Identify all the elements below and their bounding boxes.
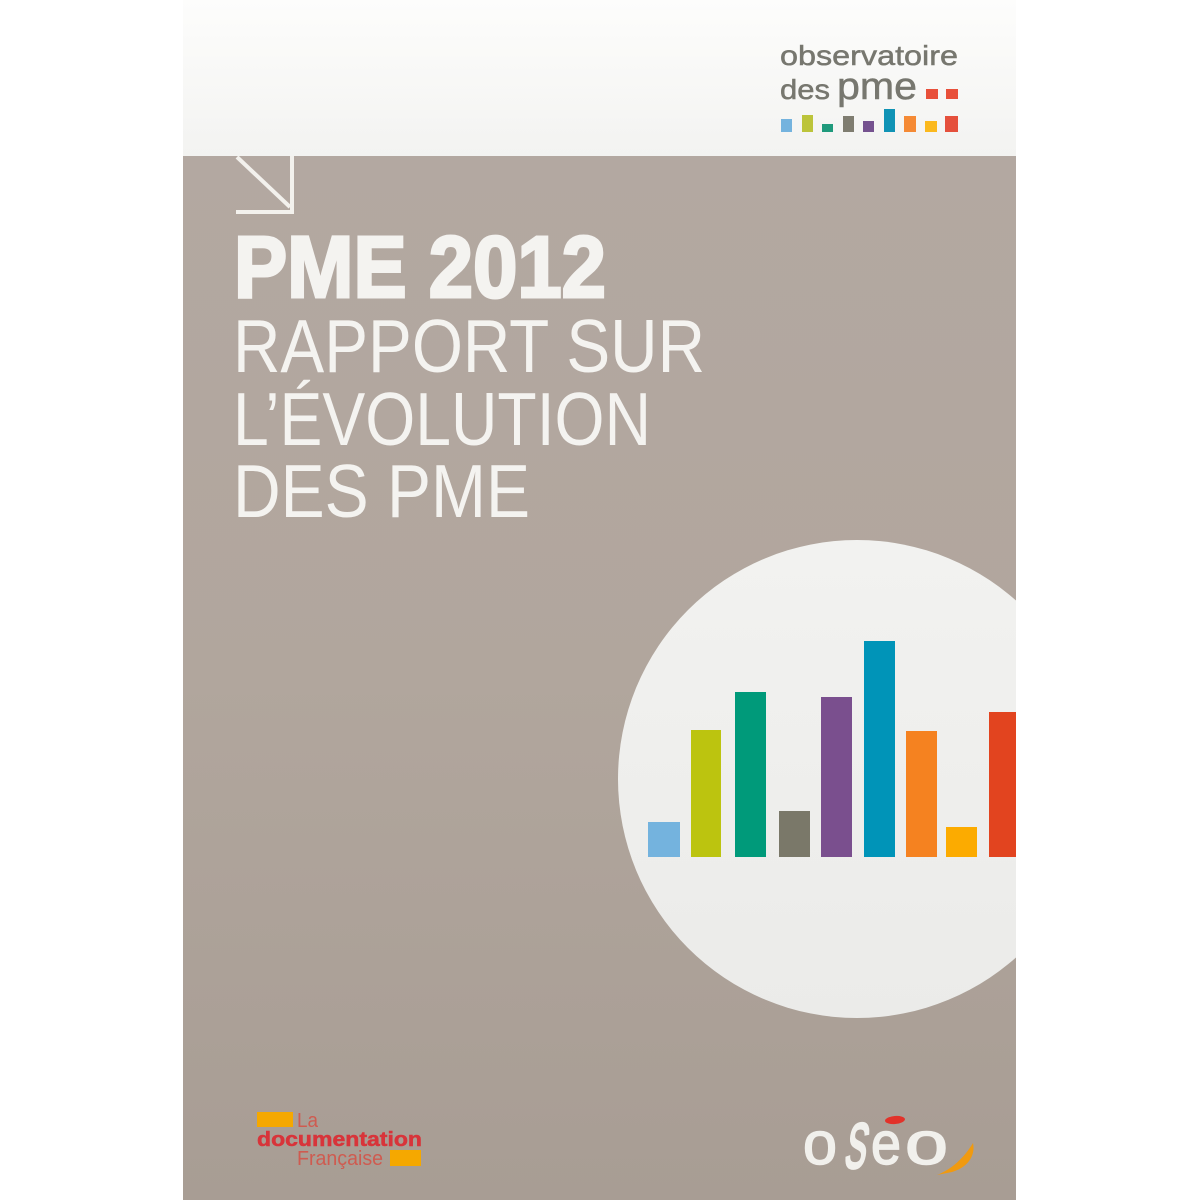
logo text <box>257 1110 422 1170</box>
logo wordmark: o <box>803 1110 837 1177</box>
subtitle: RAPPORT SUR <box>233 304 705 388</box>
icon: corner arrow <box>236 156 292 212</box>
logo wordmark <box>803 1093 948 1187</box>
logo text: La <box>297 1110 319 1132</box>
logo text: documentation <box>257 1129 422 1151</box>
logo yellow block bottom <box>390 1150 421 1166</box>
logo: oseo <box>803 1093 974 1187</box>
subtitle: DES PME <box>233 449 530 533</box>
logo mini bar chart <box>781 109 958 132</box>
logo red accent <box>885 1115 905 1125</box>
logo wordmark: observatoire <box>780 40 958 71</box>
bar chart <box>648 641 1016 857</box>
subtitle: L’ÉVOLUTION <box>233 377 651 461</box>
title <box>233 219 705 533</box>
logo wordmark: o <box>905 1110 948 1177</box>
subtitle <box>233 304 705 533</box>
logo yellow block top <box>257 1112 293 1127</box>
grey cover panel <box>183 156 1016 1200</box>
panel: circle bar chart <box>618 540 1016 1018</box>
white circle <box>618 540 1016 1018</box>
logo wordmark: e <box>871 1110 901 1177</box>
logo orange swoosh <box>937 1143 974 1175</box>
logo wordmark: des <box>780 74 830 105</box>
logo wordmark: pme <box>837 66 917 108</box>
logo: La documentation Française <box>257 1110 422 1170</box>
title: PME 2012: PME 2012 <box>234 219 606 316</box>
logo: observatoire des pme <box>780 40 958 132</box>
header band <box>183 0 1016 156</box>
book cover <box>183 44 1016 1200</box>
logo text: Française <box>297 1148 383 1170</box>
logo wordmark: s <box>840 1093 878 1187</box>
logo red squares <box>926 89 958 99</box>
logo wordmark <box>780 40 958 108</box>
